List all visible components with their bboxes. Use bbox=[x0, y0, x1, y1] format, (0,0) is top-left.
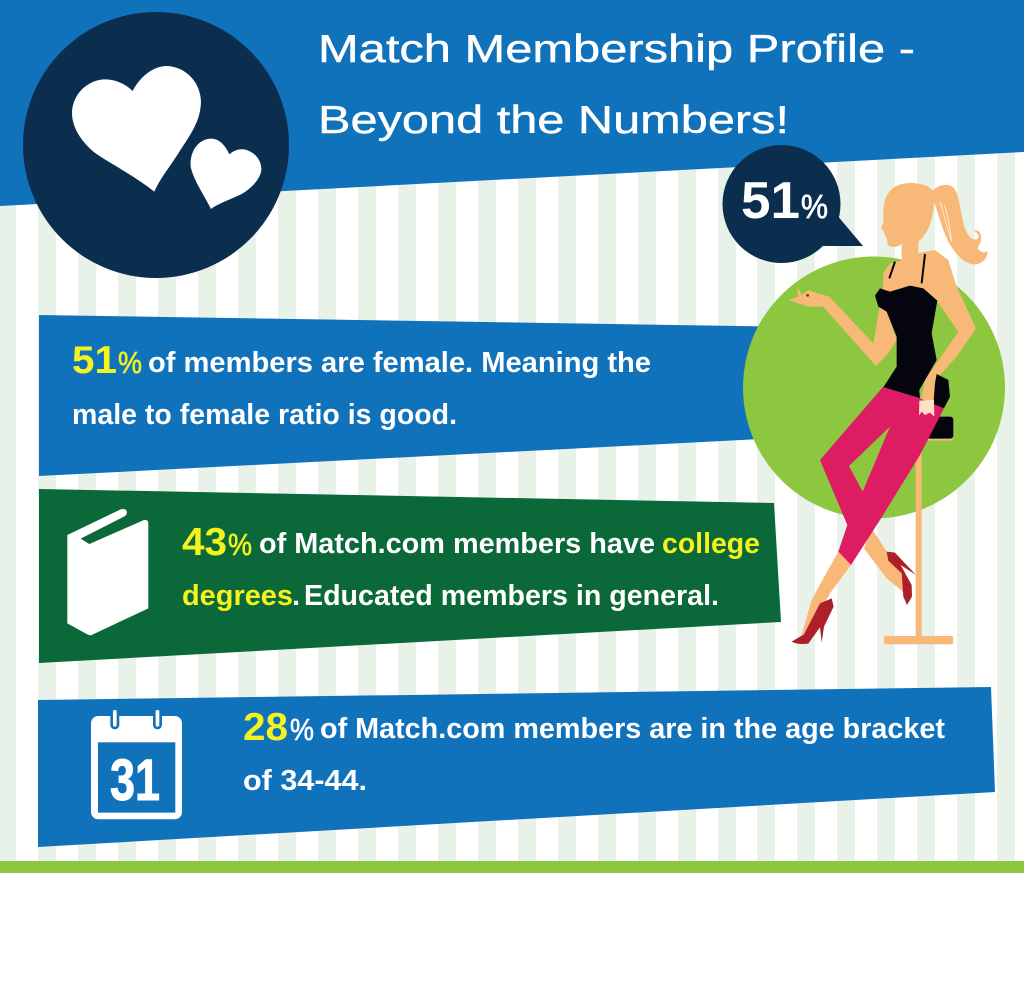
text: college share: 43 bbox=[182, 521, 227, 564]
illustration: woman on stool bbox=[788, 183, 987, 644]
speech bubble: 51%: 51 bbox=[741, 172, 800, 230]
icon: calendar bbox=[91, 709, 182, 819]
text: age share: of Match.com members are in the age bracket bbox=[320, 713, 945, 745]
text: age share: of 34-44. bbox=[243, 765, 367, 797]
icon: calendar: 31 bbox=[110, 748, 160, 813]
stool bbox=[884, 417, 953, 644]
text: female share: of members are female. Meaning the bbox=[148, 347, 651, 379]
text: college share: . bbox=[292, 580, 300, 612]
speech bubble: 51%: % bbox=[801, 188, 828, 225]
torso and arms bbox=[788, 240, 976, 417]
text: female share: % bbox=[118, 345, 142, 380]
pants bbox=[820, 387, 944, 565]
bottom green bar bbox=[0, 861, 1024, 873]
text: age share: % bbox=[290, 712, 314, 747]
text: female share: male to female ratio is good. bbox=[72, 399, 457, 431]
green circle bbox=[743, 256, 1005, 518]
header band bbox=[0, 0, 1024, 206]
panel: female members bbox=[39, 315, 800, 476]
icon: hearts badge bbox=[23, 12, 289, 278]
text: college share: Educated members in general. bbox=[304, 580, 719, 612]
text: college share: of Match.com members have bbox=[259, 528, 655, 560]
text: age share: 28 bbox=[243, 706, 288, 749]
legs and shoes bbox=[792, 528, 916, 644]
panel: college degrees bbox=[39, 489, 781, 663]
text: female share: 51 bbox=[72, 339, 117, 382]
text: college share bbox=[182, 521, 760, 612]
title bbox=[318, 28, 915, 142]
text: college share: % bbox=[228, 527, 252, 562]
text: college share: college bbox=[662, 528, 760, 560]
icon: book bbox=[67, 509, 148, 635]
title: Match Membership Profile - bbox=[318, 28, 915, 71]
hair and head bbox=[881, 183, 987, 264]
title: Beyond the Numbers! bbox=[318, 99, 789, 142]
text: age share bbox=[243, 706, 945, 797]
panel: age bracket bbox=[38, 687, 995, 847]
speech bubble: 51% bbox=[722, 145, 863, 263]
text: college share: degrees bbox=[182, 580, 293, 612]
text: female share bbox=[72, 339, 651, 431]
